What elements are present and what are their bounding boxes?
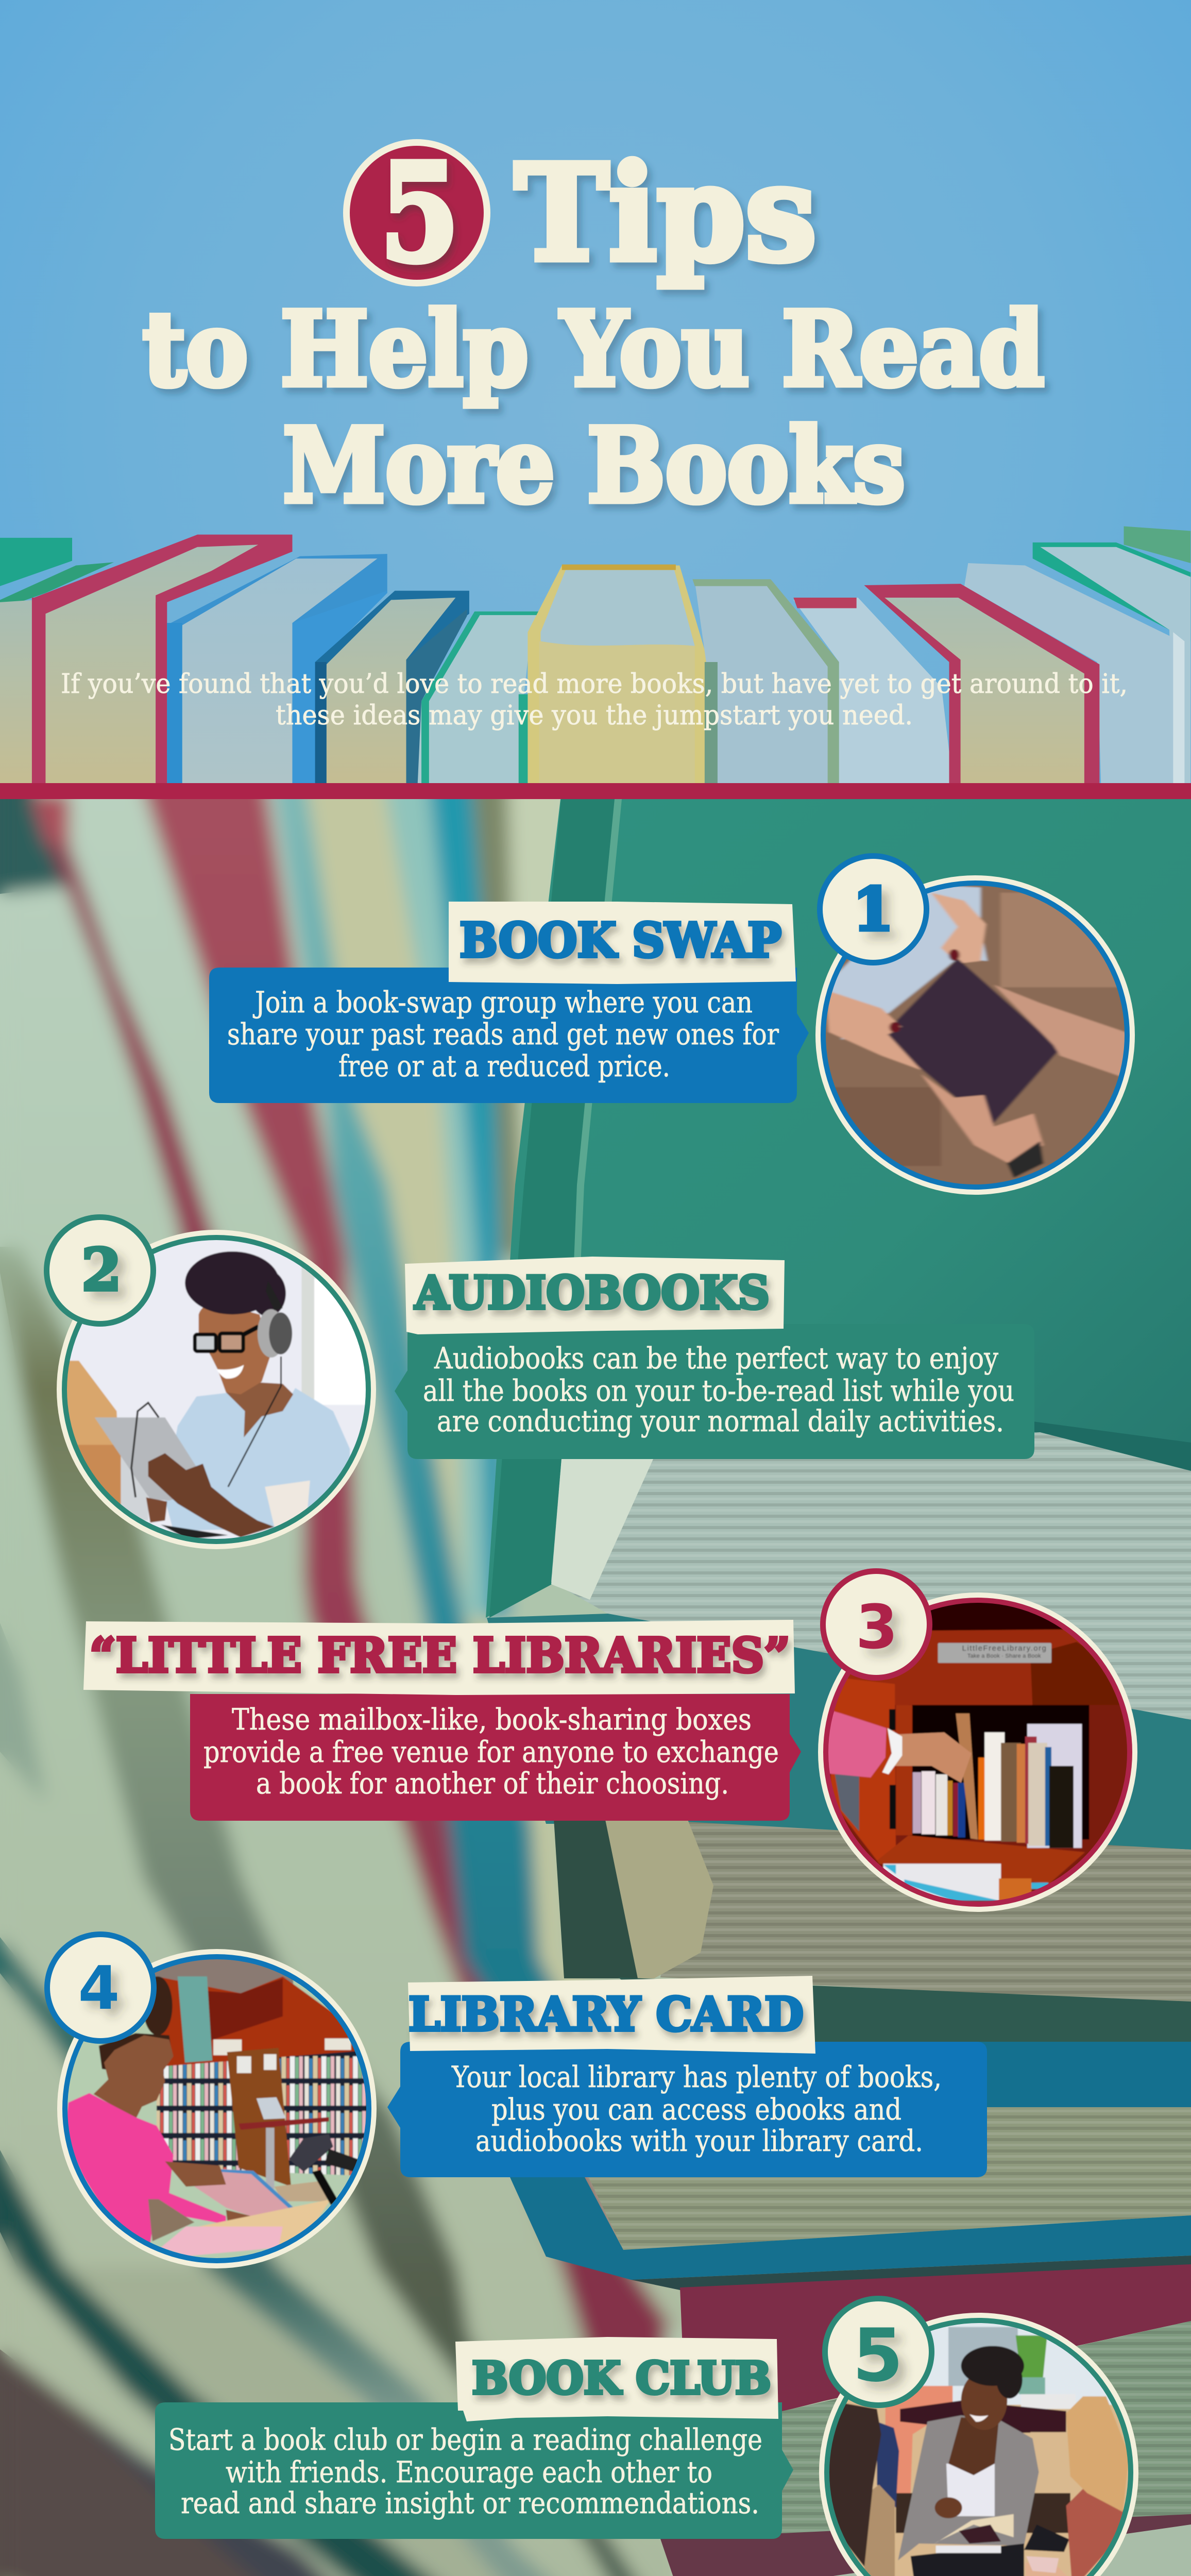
description box <box>395 1324 1034 1459</box>
description box: provide a free venue for anyone to exchange <box>203 1735 779 1769</box>
tip 3: little free libraries <box>83 1568 1144 1919</box>
heading banner: AUDIOBOOKS <box>414 1266 770 1319</box>
title line: More Books: More Books <box>283 405 905 526</box>
description box: all the books on your to-be-read list while you <box>423 1374 1014 1408</box>
number badge 5: 5 <box>853 2313 903 2398</box>
description box: Audiobooks can be the perfect way to enjoy <box>434 1342 999 1376</box>
tan page block <box>660 1822 1191 2004</box>
photo circle: book club discussion <box>814 2308 1144 2576</box>
description box: a book for another of their choosing. <box>256 1767 729 1801</box>
cover edge shading <box>1034 1422 1191 1471</box>
number badge 5 <box>822 2296 934 2408</box>
description box <box>155 2402 793 2539</box>
heading banner: BOOK CLUB <box>472 2352 771 2404</box>
intro text: If you’ve found that you’d love to read more books, but have yet to get around to it, <box>61 669 1128 700</box>
photo circle: hand reaching into a little free library <box>814 1589 1144 1919</box>
plaque text: Take a Book · Share a Book <box>967 1653 1041 1659</box>
number badge 1 <box>817 853 929 965</box>
description box: Start a book club or begin a reading challenge <box>168 2423 762 2457</box>
green pages <box>773 2321 1191 2576</box>
intro text: these ideas may give you the jumpstart you need. <box>276 700 913 731</box>
teal book cover <box>486 773 1191 1618</box>
number badge 2 <box>44 1214 156 1327</box>
description box: share your past reads and get new ones for <box>227 1018 779 1052</box>
tip 4: library card <box>44 1931 987 2275</box>
number 5 badge: 5 <box>380 133 460 292</box>
plaque text: LittleFreeLibrary.org <box>962 1645 1046 1653</box>
lower red band <box>660 2514 1191 2576</box>
description box: Your local library has plenty of books, <box>451 2060 942 2094</box>
description box: audiobooks with your library card. <box>475 2124 923 2158</box>
description box: These mailbox-like, book-sharing boxes <box>232 1703 752 1737</box>
description box: are conducting your normal daily activities. <box>437 1404 1004 1438</box>
title line: to Help You Read: to Help You Read <box>143 289 1044 409</box>
stacked books background (right side) <box>486 773 1191 2576</box>
blue-teal book cover <box>487 1614 1191 1850</box>
description box: plus you can access ebooks and <box>491 2093 901 2127</box>
plaque text <box>938 1643 1051 1663</box>
number badge 2: 2 <box>81 1236 122 1304</box>
blue book band <box>773 2042 1191 2111</box>
description box: with friends. Encourage each other to <box>226 2455 712 2489</box>
dark spine <box>554 1819 639 1978</box>
description box: Join a book-swap group where you can <box>253 986 753 1020</box>
heading banner <box>455 2337 778 2421</box>
header sky background <box>0 0 1191 788</box>
number 5 badge <box>343 133 490 292</box>
header row of books <box>0 527 1190 784</box>
tan pages lower <box>585 2107 1191 2250</box>
heading banner <box>449 902 796 984</box>
photo circle: man with headphones and tablet <box>52 1226 381 1556</box>
number badge 4: 4 <box>78 1954 120 2023</box>
title line: Tips: Tips <box>515 137 816 291</box>
blurred book spines background <box>0 799 838 2576</box>
pale pages <box>690 2524 1191 2576</box>
heading banner: BOOK SWAP <box>460 912 781 968</box>
number badge 4 <box>44 1931 157 2044</box>
heading banner <box>405 1257 785 1334</box>
photo circle: girl with book at library counter <box>52 1945 381 2275</box>
number badge 1: 1 <box>853 875 894 944</box>
number badge 3: 3 <box>856 1591 898 1663</box>
red book <box>680 2264 1191 2411</box>
grey page block <box>551 1432 1191 1720</box>
title <box>143 133 1044 526</box>
number badge 3 <box>820 1568 932 1681</box>
description box <box>387 2042 987 2177</box>
description box: free or at a reduced price. <box>338 1049 670 1083</box>
description box: read and share insight or recommendations. <box>181 2486 759 2520</box>
dark green cover <box>618 1977 1191 2056</box>
photo circle: hands exchanging a book <box>802 875 1159 1197</box>
description box <box>190 1694 801 1821</box>
heading banner: “LITTLE FREE LIBRARIES” <box>90 1628 790 1683</box>
tip 5: book club <box>155 2296 1144 2576</box>
tip 2: audiobooks <box>44 1214 1034 1556</box>
description box <box>209 968 809 1103</box>
heading banner <box>408 1976 815 2054</box>
heading banner: LIBRARY CARD <box>409 1987 804 2042</box>
tip 1: book swap <box>209 853 1159 1197</box>
red divider band <box>0 783 1191 799</box>
intro text <box>61 669 1128 731</box>
